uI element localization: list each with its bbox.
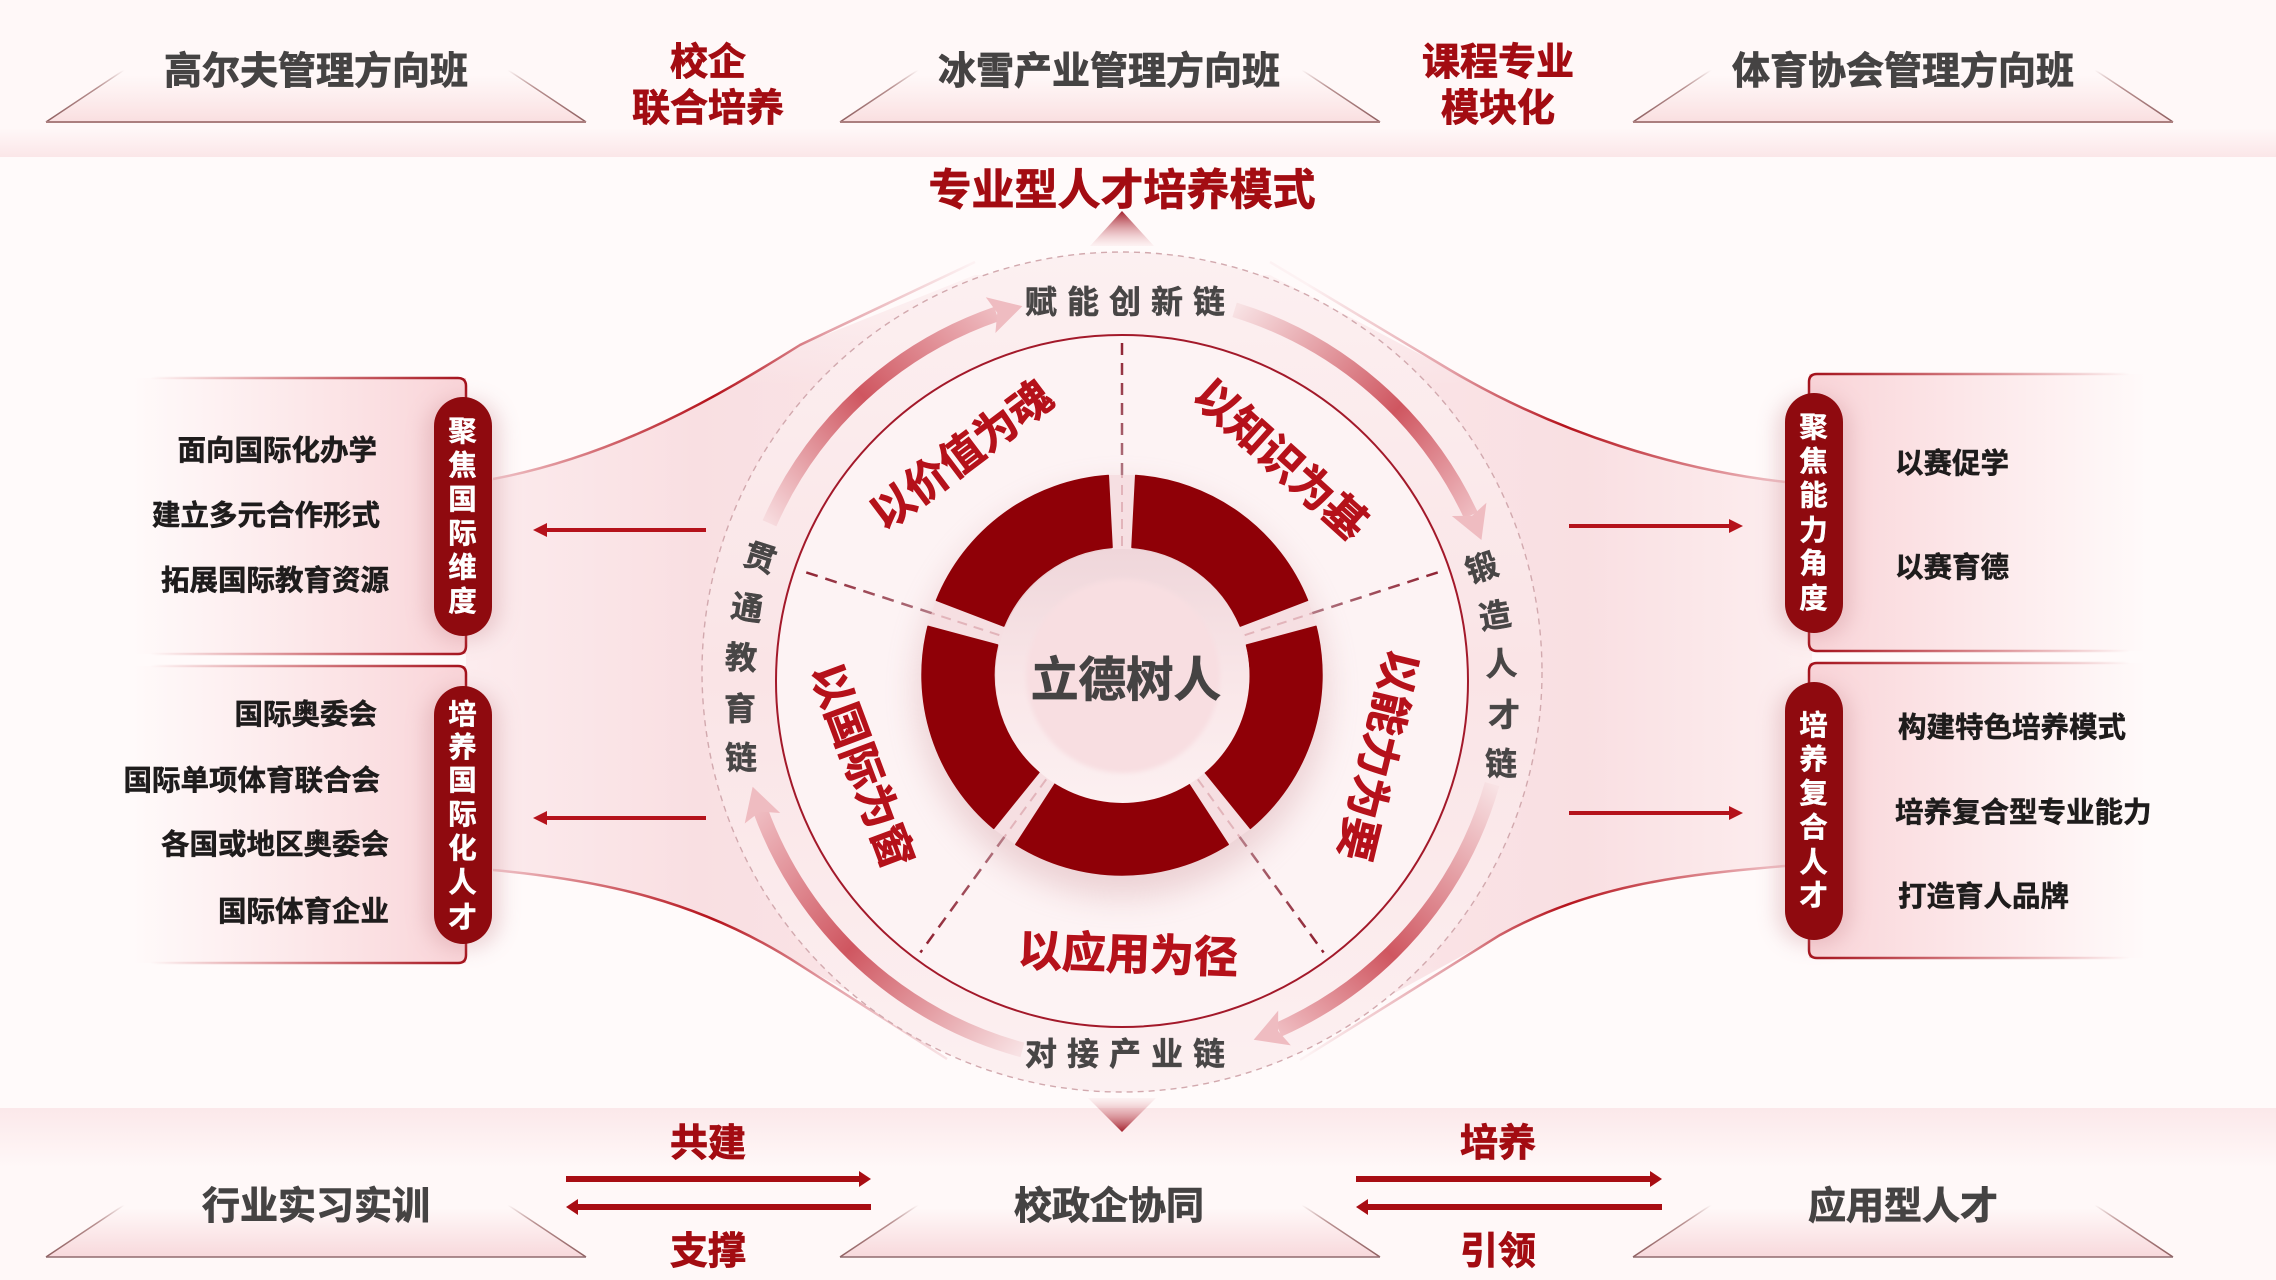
list: 国际组织: 国际体育企业: [218, 896, 389, 928]
chain label: 对接产业链: 产: [1109, 1036, 1141, 1072]
arrows: 共建 / 支撑: [566, 1171, 871, 1215]
tab: 培养复合人才: 复: [1799, 778, 1828, 810]
chain label: 锻造人才链: 人: [1484, 645, 1518, 683]
list: 以赛: 以赛促学: [1895, 447, 2009, 480]
sector label: 以知识为基: 以知识为基: [1184, 370, 1376, 550]
tab: 聚焦能力角度: 焦: [1799, 446, 1828, 478]
arrow: right lower: [1569, 806, 1743, 820]
label: 校企联合培养: [632, 42, 784, 130]
label: 支撑: 支撑: [670, 1231, 746, 1273]
platform: 校政企协同: 校政企协同: [1014, 1186, 1204, 1228]
list: 国际化办学: 面向国际化办学: [177, 435, 377, 467]
tab: 聚焦国际维度: 焦: [448, 450, 477, 482]
chain label: 贯通教育链: 贯: [739, 536, 781, 580]
circular arrows: [735, 289, 1498, 1057]
tab: 聚焦能力角度: 度: [1799, 583, 1828, 615]
heading: 专业型人才培养模式: 专业型人才培养模式: [928, 167, 1316, 215]
tab: 聚焦能力角度: [1785, 393, 1843, 633]
chain label: 锻造人才链: 造: [1476, 596, 1514, 636]
sector label: 以能力为要: 以能力为要: [1329, 645, 1425, 865]
label: 课程专业模块化: 课程专业: [1422, 42, 1574, 84]
top row: platforms: [46, 42, 2173, 130]
tab: 培养国际化人才: 际: [448, 799, 477, 831]
tab: 聚焦能力角度: 聚: [1799, 412, 1828, 444]
label: 课程专业模块化: [1422, 42, 1574, 130]
chain label: 锻造人才链: 锻: [1461, 546, 1503, 590]
label: 校企联合培养: 校企: [670, 42, 746, 84]
tab: 培养复合人才: 才: [1799, 880, 1828, 912]
funnel connecting panels to the circle: [466, 250, 1812, 1100]
chain label: 对接产业链: 业: [1151, 1036, 1183, 1072]
tab: 聚焦能力角度: 角: [1799, 548, 1828, 580]
center disc: 立德树人: 立德树人: [1031, 654, 1221, 708]
tab: 聚焦能力角度: 能: [1799, 480, 1828, 512]
tab: 培养复合人才: 合: [1799, 812, 1828, 844]
tab: 培养复合人才: [1785, 682, 1843, 940]
tab: 培养国际化人才: 国: [448, 765, 477, 797]
chain label: 对接产业链: 接: [1067, 1036, 1099, 1072]
arrow: left lower: [533, 811, 706, 825]
chain label: 贯通教育链: 通: [728, 588, 766, 628]
label: 培养: 培养: [1460, 1123, 1536, 1165]
chain label: 赋能创新链: 新: [1151, 284, 1183, 320]
list: 国际化办学: 拓展国际教育资源: [161, 565, 389, 597]
list: 复合人才: 打造育人品牌: [1898, 881, 2069, 913]
platform: 行业实习实训: [46, 1186, 586, 1257]
tab: 培养国际化人才: 化: [448, 833, 477, 865]
arrow: to 对接产业链: [1247, 784, 1492, 1057]
chain label: 贯通教育链: 教: [724, 639, 758, 677]
outer dashed circle: [702, 252, 1542, 1092]
chain label: 贯通教育链: 链: [725, 740, 757, 776]
chain label: 赋能创新链: 赋: [1025, 284, 1057, 320]
platform: 冰雪产业管理方向班: 冰雪产业管理方向班: [938, 51, 1280, 93]
arrow: to 锻造人才链: [1235, 310, 1498, 547]
chain label: 对接产业链: 链: [1193, 1036, 1225, 1072]
list: 以赛: 以赛育德: [1895, 551, 2009, 584]
tab: 聚焦国际维度: [434, 397, 492, 636]
arrow: to 贯通教育链: [735, 781, 1022, 1050]
chain label: 赋能创新链: 创: [1109, 284, 1141, 320]
list: 国际组织: 国际奥委会: [234, 699, 377, 731]
tab: 培养复合人才: 人: [1799, 847, 1828, 879]
tab: 培养国际化人才: 人: [448, 867, 477, 899]
panel: 培养复合人才: [1777, 663, 2152, 958]
tab: 培养国际化人才: 培: [448, 699, 477, 731]
tab: 聚焦国际维度: 际: [448, 518, 477, 550]
label: 校企联合培养: 联合培养: [632, 88, 784, 130]
bottom row: [46, 1123, 2173, 1273]
tab: 培养国际化人才: 才: [448, 902, 477, 934]
sector label: 以价值为魂: 以价值为魂: [862, 372, 1062, 540]
chain label: 赋能创新链: 链: [1193, 284, 1225, 320]
tab: 培养国际化人才: 养: [448, 732, 477, 764]
platform: 应用型人才: [1633, 1186, 2173, 1257]
label: 引领: 引领: [1460, 1231, 1536, 1273]
platform: 高尔夫管理方向班: [46, 51, 586, 122]
chain label: 锻造人才链: [1461, 546, 1520, 782]
sector label: 以应用为径: 以应用为径: [1017, 927, 1239, 983]
platform: 校政企协同: [840, 1186, 1380, 1257]
tab: 聚焦国际维度: 度: [448, 586, 477, 618]
top band: [0, 0, 2276, 157]
tab: 聚焦国际维度: 聚: [448, 416, 477, 448]
arrow: right upper: [1569, 519, 1743, 533]
list: 复合人才: 培养复合型专业能力: [1895, 797, 2152, 829]
inner circle with sectors: [776, 335, 1468, 1027]
arrow: to 赋能创新链: [770, 289, 1027, 523]
chain label: 贯通教育链: [724, 536, 781, 776]
bottom band: [0, 1108, 2276, 1280]
tab: 聚焦能力角度: 力: [1799, 515, 1828, 547]
tab: 培养国际化人才: [434, 686, 492, 944]
list: 国际化办学: [152, 435, 389, 597]
panel: 培养国际化人才: [123, 666, 500, 963]
center disc: 立德树人: [996, 549, 1250, 803]
tab: 培养复合人才: 养: [1799, 744, 1828, 776]
label: 共建: 共建: [670, 1123, 746, 1165]
tab: 培养复合人才: 培: [1799, 710, 1828, 742]
chain label: 赋能创新链: [1025, 284, 1225, 320]
list: 国际组织: 国际单项体育联合会: [123, 765, 380, 797]
donut ring: five segments: [855, 437, 1369, 945]
list: 以赛: [1895, 447, 2009, 584]
list: 国际组织: [123, 699, 389, 928]
icon: up triangle: [1090, 211, 1154, 246]
tab: 聚焦国际维度: 国: [448, 484, 477, 516]
icon: down triangle: [1088, 1098, 1156, 1132]
platform: 冰雪产业管理方向班: [840, 51, 1380, 122]
sector labels: [801, 370, 1425, 983]
platform: 应用型人才: 应用型人才: [1808, 1186, 1998, 1228]
chain label: 对接产业链: [1025, 1036, 1225, 1072]
label: 课程专业模块化: 模块化: [1441, 88, 1555, 130]
list: 复合人才: 构建特色培养模式: [1898, 712, 2126, 744]
sector dividers: [801, 338, 1443, 952]
panel: 聚焦能力角度: [1777, 374, 2149, 651]
chain label: 锻造人才链: 才: [1488, 697, 1520, 733]
list: 国际化办学: 建立多元合作形式: [152, 500, 380, 532]
platform: 高尔夫管理方向班: 高尔夫管理方向班: [164, 51, 468, 93]
list: 复合人才: [1895, 712, 2152, 913]
chain label: 对接产业链: 对: [1025, 1036, 1057, 1072]
arrows: 培养 / 引领: [1356, 1171, 1662, 1215]
tab: 聚焦国际维度: 维: [448, 552, 477, 584]
sector label: 以国际为窗: 以国际为窗: [801, 657, 921, 875]
chain label: 赋能创新链: 能: [1067, 284, 1099, 320]
chain label: 贯通教育链: 育: [724, 691, 756, 727]
panel: 聚焦国际维度: [130, 378, 500, 654]
list: 国际组织: 各国或地区奥委会: [161, 828, 389, 861]
platform: 体育协会管理方向班: 体育协会管理方向班: [1732, 51, 2074, 93]
chain label: 锻造人才链: 链: [1485, 746, 1517, 782]
platform: 行业实习实训: 行业实习实训: [202, 1186, 430, 1228]
platform: 体育协会管理方向班: [1633, 51, 2173, 122]
arrow: left upper: [533, 523, 706, 537]
